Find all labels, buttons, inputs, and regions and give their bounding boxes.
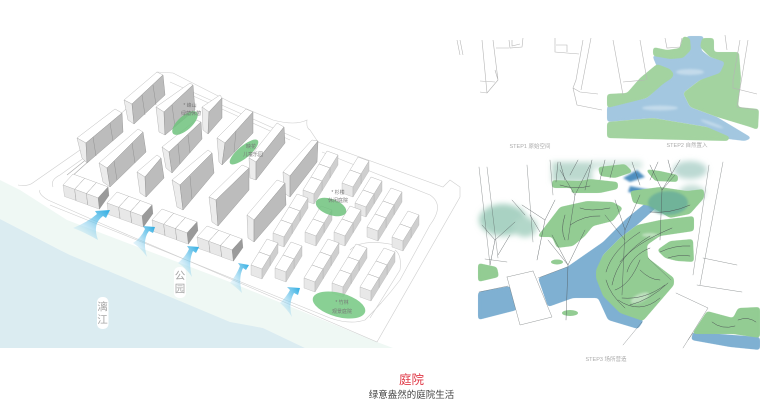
green: lower right lawn [692, 307, 760, 338]
building: tower 11 [283, 140, 318, 197]
sketch lines: buildings, bridge and paths [479, 160, 742, 348]
courtyard: leisure garden: * 杉楼 [331, 189, 345, 196]
label: park: 公 [175, 270, 186, 282]
courtyard: children garden [226, 136, 263, 168]
courtyard: scenic garden [310, 286, 368, 324]
arrow: entrance 5 [280, 287, 300, 317]
courtyard: north garden: * 峰山 [183, 102, 197, 109]
water: far pond [623, 170, 650, 194]
building: tower 10 [249, 123, 285, 180]
watercolor green right [683, 38, 759, 130]
green: left lawn [478, 263, 499, 282]
courtyard: scenic garden: * 竹林 [335, 299, 349, 306]
green: small lawns [551, 260, 578, 316]
park strip [0, 180, 393, 348]
courtyard: north garden: 绿荫休憩 [181, 110, 201, 117]
low-rise blocks: south-east cluster [251, 239, 395, 301]
subtitle: 绿意盎然的庭院生活 [369, 389, 455, 401]
arrow: entrance 3 [178, 246, 199, 277]
building: tower 9 [217, 109, 253, 165]
label: river: 江 [97, 314, 108, 326]
building: tower 1 [124, 72, 165, 124]
caption: STEP1 原始空间 [510, 142, 550, 150]
panel: step 1 original space [457, 38, 602, 150]
lawn highlights [629, 233, 658, 306]
green: upper strip [552, 179, 618, 193]
panel: step 3 place making [478, 160, 760, 363]
arrow: entrance 4 [230, 263, 249, 293]
courtyard: scenic garden: 观景庭院 [332, 308, 352, 315]
label: river: 漓 [97, 300, 108, 313]
courtyard: children garden: 映花 [246, 143, 256, 150]
title: 庭院 [399, 372, 424, 387]
tree shade [648, 191, 688, 215]
watercolor green middle [607, 64, 674, 108]
sketch lines: bare trees [482, 160, 680, 320]
green: upper-right lawn with tree shade [630, 187, 704, 218]
courtyard: leisure garden [313, 189, 349, 220]
building: tower 7 [162, 120, 202, 173]
label: park: 园 [175, 283, 185, 295]
green: far lawns [598, 164, 678, 182]
panel: site axonometric plan [0, 72, 460, 348]
building: tower 8 [172, 150, 214, 210]
courtyard: children garden: 儿童乐园 [243, 151, 263, 158]
label: park [174, 267, 186, 298]
building: tower 5 [156, 83, 195, 135]
sketch lines [613, 35, 757, 110]
building: tower 4 [137, 155, 164, 197]
label: river [97, 297, 108, 329]
water: main channel [538, 202, 657, 329]
courtyard: leisure garden: 休闲庭院 [328, 197, 348, 204]
building: tower 3 [99, 129, 146, 187]
watercolor green bottom [607, 118, 730, 141]
caption: STEP2 自然置入 [667, 141, 708, 149]
water wash streaks [642, 69, 724, 130]
green: mid-left lawn [537, 201, 623, 248]
sketch lines: lawn hatching [560, 185, 756, 327]
water: lower right channel [691, 332, 760, 350]
arrow: entrance 2 [133, 226, 155, 257]
low-rise blocks: north-east cluster [273, 151, 419, 251]
green: central lawn [596, 216, 694, 321]
low-rise blocks: riverside row [63, 174, 243, 261]
sketch lines [457, 38, 602, 110]
building: tower 12 [209, 165, 249, 226]
water: left channel [478, 286, 517, 320]
white bridge [507, 271, 552, 325]
courtyard: north garden [168, 102, 202, 139]
watercolor green top left [653, 36, 691, 59]
building: tower 6 [202, 95, 222, 134]
caption: STEP3 场所营造 [586, 355, 627, 363]
building: tower 2 [77, 109, 123, 163]
arrow: entrance 1 [73, 210, 110, 240]
green: oval lawn [657, 239, 694, 262]
building: tower 13 [247, 180, 286, 242]
river [0, 219, 305, 348]
panel: step 2 natural insertion [607, 35, 759, 149]
site outline and roads [18, 72, 460, 342]
tree canopy washes [479, 161, 707, 237]
watercolor water [607, 36, 752, 141]
